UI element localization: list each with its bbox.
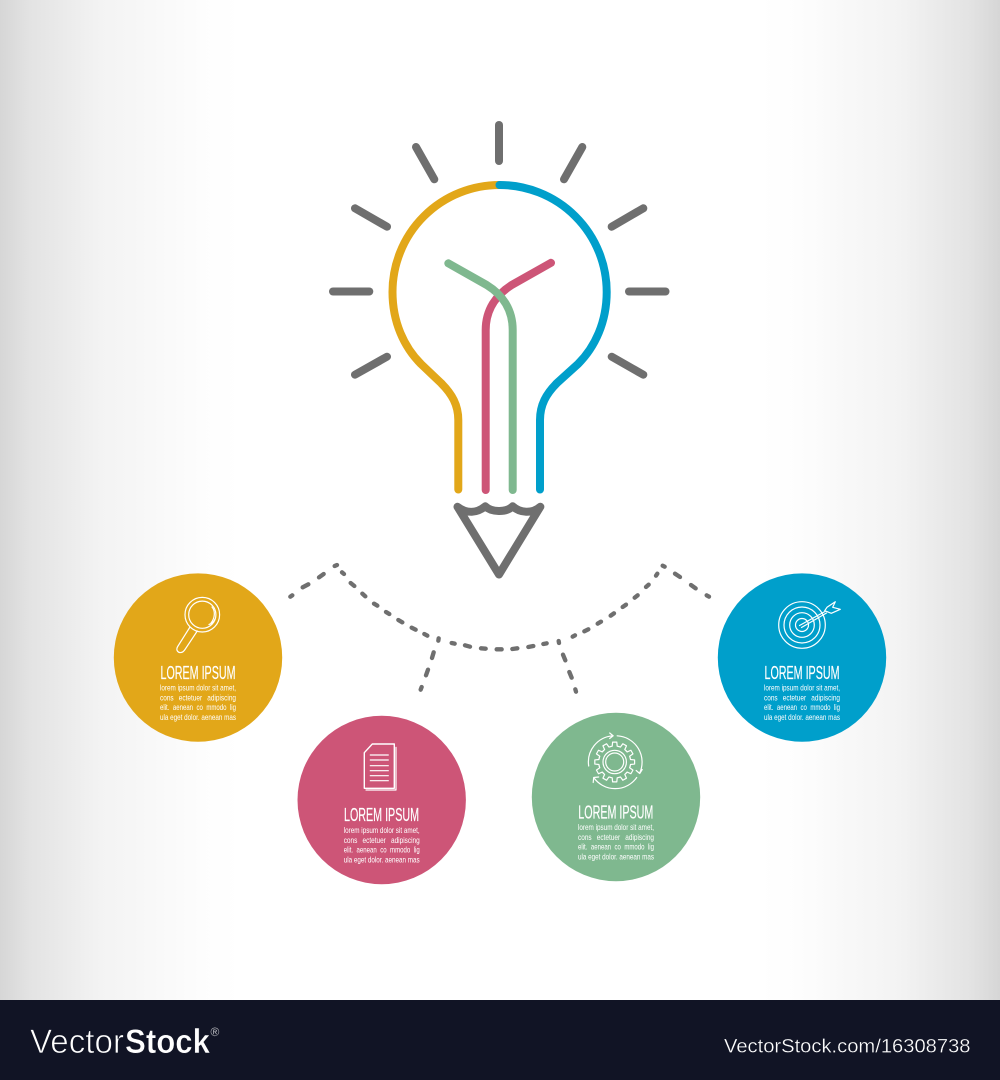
- body text: [160, 683, 236, 722]
- bulb right outline: [500, 185, 607, 490]
- body text: lorem ipsum dolor sit amet,: [764, 683, 840, 693]
- pencil tip: [458, 506, 540, 574]
- panel: green circle: [532, 713, 700, 881]
- heading: LOREM IPSUM: [344, 805, 419, 825]
- icon: gear with arrows: [588, 733, 642, 789]
- heading: LOREM IPSUM: [764, 663, 840, 683]
- body text: elit. aenean co mmodo lig: [344, 845, 420, 855]
- heading: LOREM IPSUM: [578, 803, 653, 823]
- icon: target with arrow: [779, 602, 840, 648]
- body text: ula eget dolor. aenean mas: [578, 852, 654, 862]
- body text: ula eget dolor. aenean mas: [764, 712, 840, 722]
- pink filament: [486, 263, 551, 490]
- icon: document: [364, 744, 396, 790]
- panel: pink circle: [298, 716, 466, 884]
- body text: lorem ipsum dolor sit amet,: [578, 822, 654, 832]
- green filament: [448, 263, 513, 490]
- body text: [344, 825, 420, 865]
- body text: [578, 822, 654, 862]
- panel: yellow circle: [114, 573, 282, 742]
- footer bar: [0, 1000, 1000, 1080]
- body text: [764, 683, 840, 722]
- dashed connectors: [290, 565, 709, 692]
- logo: Stock: [125, 1023, 210, 1061]
- logo: Vector: [30, 1023, 124, 1061]
- logo: ®: [210, 1025, 220, 1039]
- bulb left outline: [392, 185, 500, 490]
- body text: cons ectetuer adipiscing: [764, 693, 840, 703]
- body text: ula eget dolor. aenean mas: [160, 712, 236, 722]
- body text: lorem ipsum dolor sit amet,: [344, 825, 420, 835]
- body text: elit. aenean co mmodo lig: [160, 702, 236, 712]
- icon: light rays: [333, 125, 666, 375]
- body text: cons ectetuer adipiscing: [344, 835, 420, 845]
- icon: magnifying glass: [177, 597, 220, 653]
- body text: ula eget dolor. aenean mas: [344, 855, 420, 865]
- logo: [30, 1023, 220, 1061]
- body text: cons ectetuer adipiscing: [578, 832, 654, 842]
- body text: elit. aenean co mmodo lig: [764, 702, 840, 712]
- icon: pencil light bulb: [392, 185, 607, 574]
- panel: blue circle: [718, 573, 886, 742]
- image id: VectorStock.com/16308738: [724, 1037, 970, 1058]
- heading: LOREM IPSUM: [160, 663, 236, 683]
- body text: cons ectetuer adipiscing: [160, 693, 236, 703]
- body text: elit. aenean co mmodo lig: [578, 842, 654, 852]
- body text: lorem ipsum dolor sit amet,: [160, 683, 236, 693]
